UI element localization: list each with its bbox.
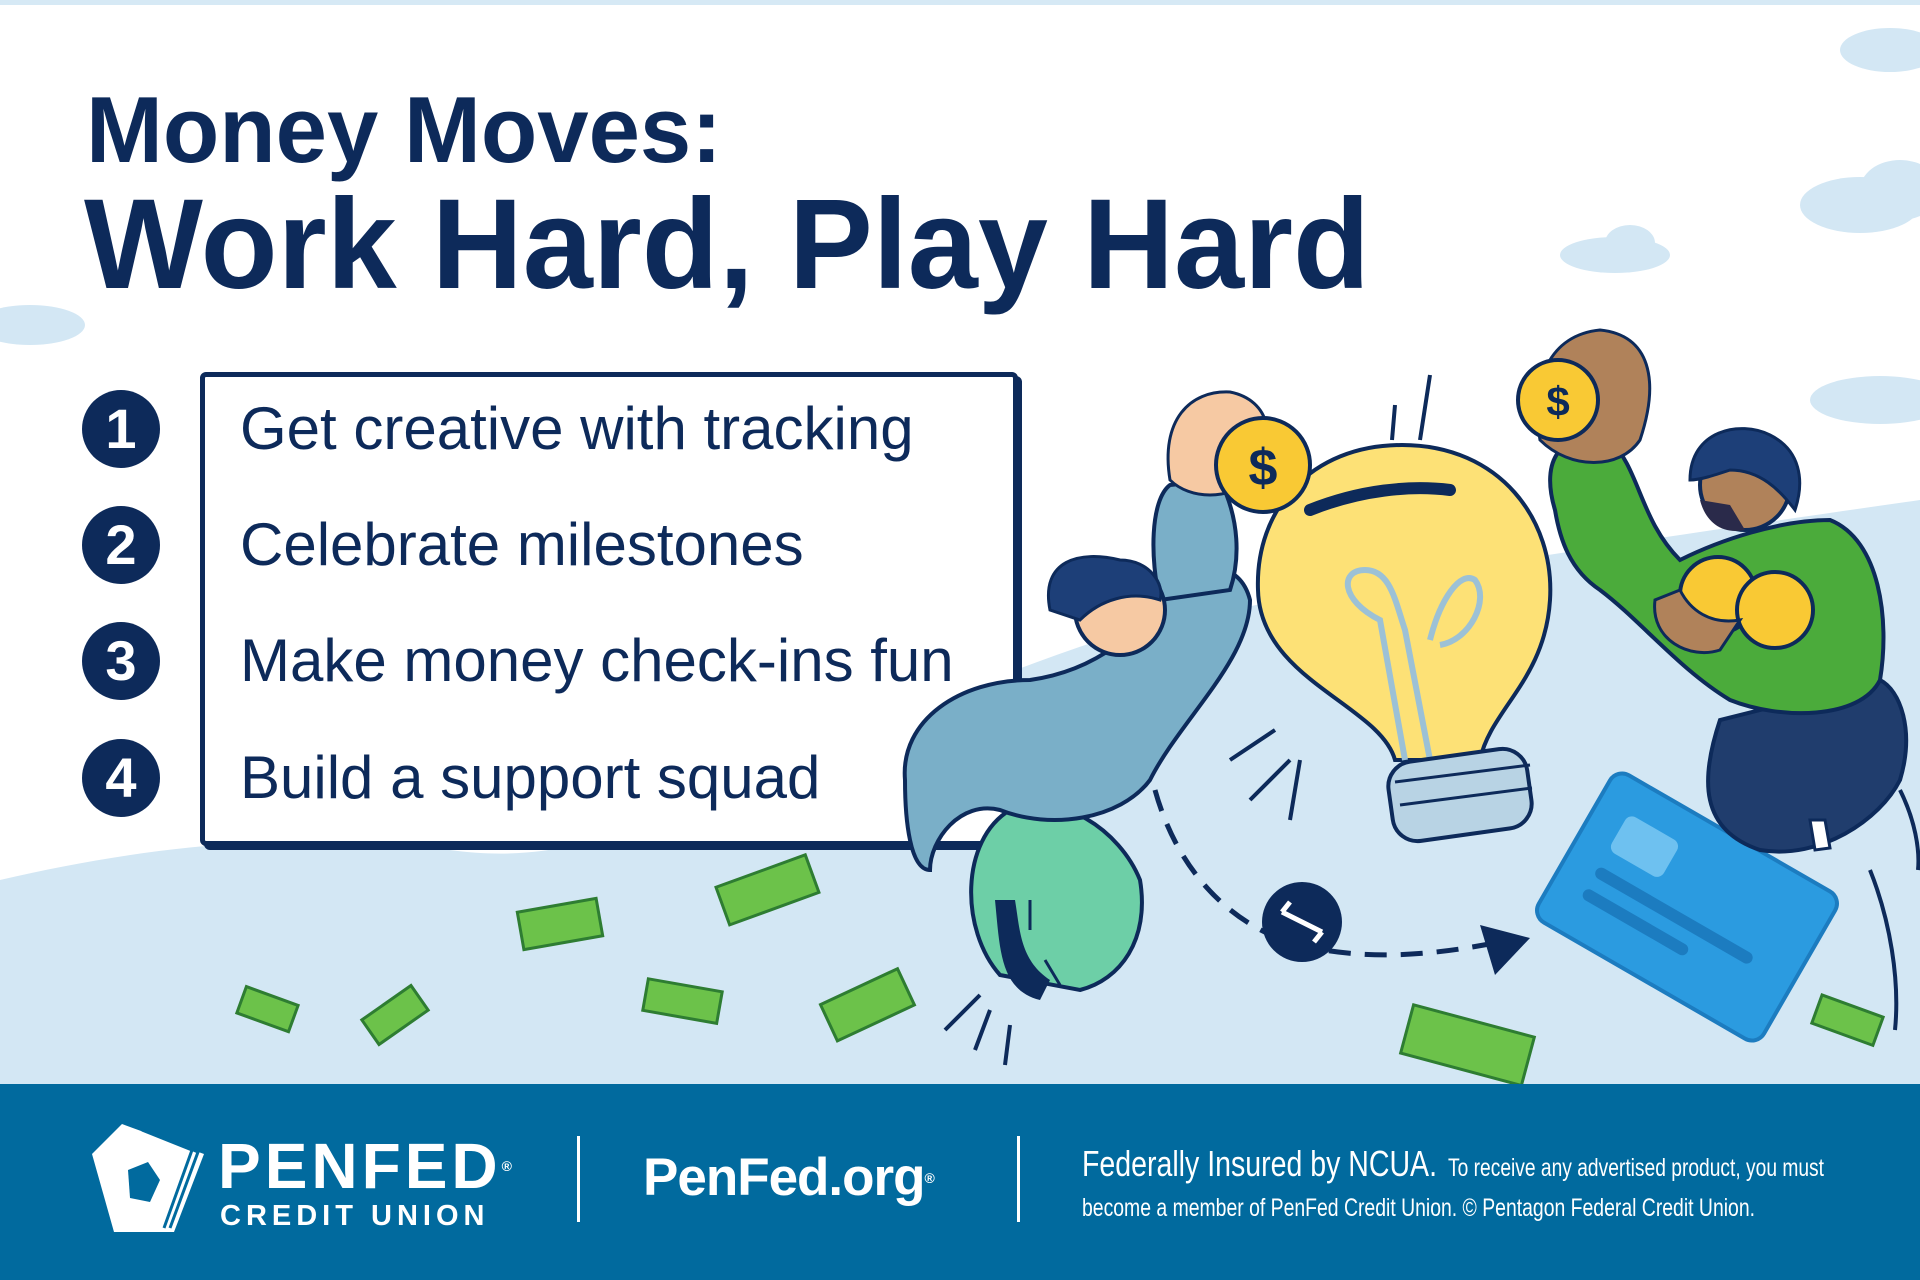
left person: $ [1249,439,1278,497]
disclaimer [1082,1143,1824,1222]
item 3: 3 [105,629,137,692]
list box [200,372,1018,846]
item 4: Build a support squad [240,744,820,811]
item 4 [82,739,820,817]
website: PenFed.org® [643,1148,934,1207]
item 2: 2 [105,513,137,576]
PENFED wordmark: CREDIT UNION [220,1200,489,1232]
footer [0,1084,1920,1280]
item 1 [82,390,914,468]
item 4: 4 [105,746,137,809]
right person [1518,330,1918,1030]
right person: $ [1546,378,1570,425]
item 2 [82,506,804,584]
list panel [82,372,1022,850]
disclaimer: Federally Insured by NCUA. [1082,1143,1437,1184]
left person [905,392,1310,1065]
logo icon [92,1124,204,1232]
credit card [1532,768,1842,1046]
lightbulb [1230,375,1550,844]
item 3: Make money check-ins fun [240,627,954,694]
title: Work Hard, Play Hard [84,173,1370,316]
money bills [237,855,1883,1085]
item 1: 1 [105,397,137,460]
PENFED wordmark: PENFED® [218,1130,516,1202]
title [84,77,1370,316]
title: Money Moves: [86,77,722,182]
item 2: Celebrate milestones [240,511,804,578]
dashed arrow [1155,790,1510,955]
item 1: Get creative with tracking [240,395,914,462]
